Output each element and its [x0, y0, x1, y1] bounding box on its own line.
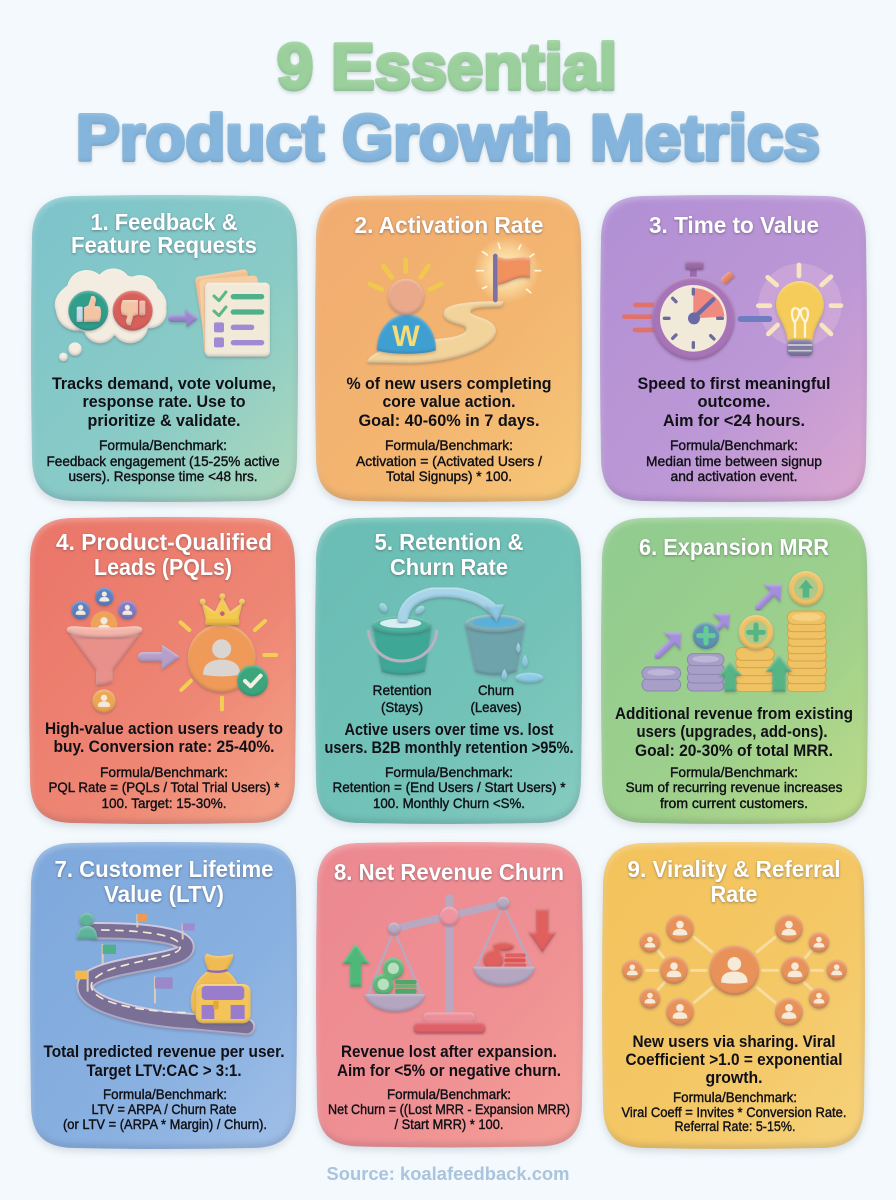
formula 9: Referral Rate: 5-15%. — [674, 1118, 796, 1134]
description 2: core value action. — [382, 392, 516, 411]
description 4 — [45, 719, 283, 756]
description 1 — [52, 374, 276, 430]
panel: 2 activation rate — [315, 195, 582, 502]
formula 2: Activation = (Activated Users / — [356, 453, 542, 469]
heading 5 — [374, 529, 524, 580]
formula 8 — [328, 1086, 570, 1132]
formula 3: Formula/Benchmark: — [670, 437, 798, 453]
heading 1: Feature Requests — [71, 232, 257, 258]
formula 1 — [46, 437, 280, 484]
formula 6: from current customers. — [660, 795, 808, 811]
description 6: Goal: 20-30% of total MRR. — [635, 741, 833, 760]
formula 5: 100. Monthly Churn <S%. — [373, 795, 525, 811]
formula 1: Feedback engagement (15-25% active — [46, 453, 280, 469]
formula 9 — [622, 1089, 846, 1134]
description 5 — [324, 720, 574, 757]
formula 3 — [646, 437, 822, 484]
formula 8: Net Churn = ((Lost MRR - Expansion MRR) — [328, 1101, 570, 1117]
formula 8: Formula/Benchmark: — [387, 1086, 511, 1102]
heading 8: 8. Net Revenue Churn — [334, 859, 564, 885]
description 3: Speed to first meaningful — [638, 374, 830, 393]
heading 7: 7. Customer Lifetime — [54, 856, 274, 882]
panel: 8 net revenue churn — [316, 842, 583, 1147]
bucket labels: (Stays) — [381, 699, 423, 715]
formula 1: Formula/Benchmark: — [99, 437, 227, 453]
formula 8: / Start MRR) * 100. — [394, 1116, 504, 1132]
bucket labels: Retention — [372, 682, 432, 698]
description 1: Tracks demand, vote volume, — [52, 374, 276, 393]
formula 4: 100. Target: 15-30%. — [102, 795, 226, 811]
description 7 — [44, 1042, 284, 1080]
description 8 — [337, 1042, 561, 1080]
description 1: response rate. Use to — [82, 392, 246, 411]
formula 6: Sum of recurring revenue increases — [626, 779, 842, 795]
description 4: buy. Conversion rate: 25-40%. — [54, 737, 274, 756]
description 9 — [626, 1032, 842, 1087]
bucket labels: (Leaves) — [470, 699, 522, 715]
description 3: Aim for <24 hours. — [663, 411, 805, 430]
description 2 — [346, 374, 552, 430]
panel: 6 expansion mrr — [601, 517, 868, 824]
description 8: Revenue lost after expansion. — [341, 1042, 557, 1061]
formula 7 — [63, 1086, 267, 1132]
heading 7 — [54, 856, 274, 907]
heading 2: 2. Activation Rate — [354, 212, 544, 238]
panel: 9 virality and referral rate — [602, 842, 865, 1149]
description 6: users (upgrades, add-ons). — [636, 722, 828, 741]
bucket labels: Churn — [478, 682, 514, 698]
description 2: Goal: 40-60% in 7 days. — [358, 411, 540, 430]
formula 6: Formula/Benchmark: — [670, 764, 798, 780]
panel: 7 customer lifetime value — [30, 842, 297, 1149]
title: Product Growth Metrics — [76, 101, 820, 174]
heading 5: 5. Retention & — [374, 529, 524, 555]
bucket labels — [372, 682, 522, 715]
description 3 — [638, 374, 830, 430]
formula 2 — [356, 437, 542, 484]
icon: user walking path to flag: W — [392, 320, 420, 353]
formula 4: PQL Rate = (PQLs / Total Trial Users) * — [48, 779, 280, 795]
description 1: prioritize & validate. — [88, 411, 240, 430]
formula 9: Formula/Benchmark: — [673, 1089, 797, 1105]
formula 9: Viral Coeff = Invites * Conversion Rate. — [622, 1104, 846, 1120]
formula 6 — [626, 764, 842, 811]
formula 3: and activation event. — [670, 468, 798, 484]
description 5: users. B2B monthly retention >95%. — [324, 738, 574, 757]
icon: referral network — [622, 914, 847, 1026]
description 6 — [615, 704, 853, 760]
icon: user walking path to flag — [367, 237, 541, 363]
icon: thought cloud, checklist — [55, 268, 270, 361]
heading 7: Value (LTV) — [104, 881, 224, 907]
formula 4: Formula/Benchmark: — [100, 764, 228, 780]
formula 1: users). Response time <48 hrs. — [68, 468, 258, 484]
panel: 4 product-qualified leads — [29, 517, 296, 824]
heading 4 — [56, 529, 272, 580]
heading 9: 9. Virality & Referral — [628, 856, 840, 882]
heading 5: Churn Rate — [390, 554, 508, 580]
formula 7: (or LTV = (ARPA * Margin) / Churn). — [63, 1116, 267, 1132]
description 8: Aim for <5% or negative churn. — [337, 1061, 561, 1080]
formula 2: Formula/Benchmark: — [385, 437, 513, 453]
description 4: High-value action users ready to — [45, 719, 283, 738]
title — [76, 30, 820, 174]
heading 9: Rate — [710, 881, 758, 907]
description 7: Total predicted revenue per user. — [44, 1042, 284, 1061]
description 5: Active users over time vs. lost — [344, 720, 554, 739]
formula 7: Formula/Benchmark: — [103, 1086, 227, 1102]
icon: balance scale — [342, 897, 557, 1034]
formula 3: Median time between signup — [646, 453, 822, 469]
source line: Source: koalafeedback.com — [326, 1164, 570, 1184]
description 9: Coefficient >1.0 = exponential — [626, 1050, 842, 1069]
title: 9 Essential — [277, 30, 617, 103]
panel: 3 time to value — [600, 195, 867, 502]
heading 4: 4. Product-Qualified — [56, 529, 272, 555]
formula 2: Total Signups) * 100. — [386, 468, 512, 484]
panel: 1 feedback and feature requests — [31, 195, 298, 502]
description 3: outcome. — [698, 392, 770, 411]
heading 1 — [71, 209, 257, 258]
description 9: New users via sharing. Viral — [632, 1032, 836, 1051]
icon: two buckets — [368, 592, 543, 683]
heading 3: 3. Time to Value — [649, 212, 819, 238]
icon: road to treasure — [75, 913, 251, 1027]
description 7: Target LTV:CAC > 3:1. — [86, 1061, 242, 1080]
icon: growing coin stacks — [642, 571, 827, 692]
formula 7: LTV = ARPA / Churn Rate — [92, 1101, 237, 1117]
heading 9 — [628, 856, 840, 907]
formula 5: Formula/Benchmark: — [385, 764, 513, 780]
description 2: % of new users completing — [346, 374, 552, 393]
formula 5 — [332, 764, 566, 811]
icon: stopwatch and light bulb — [624, 261, 842, 360]
description 6: Additional revenue from existing — [615, 704, 853, 723]
heading 6: 6. Expansion MRR — [639, 534, 829, 560]
heading 1: 1. Feedback & — [90, 209, 238, 235]
panel: 5 retention and churn rate — [315, 517, 582, 824]
description 9: growth. — [706, 1068, 762, 1087]
heading 4: Leads (PQLs) — [94, 554, 232, 580]
formula 5: Retention = (End Users / Start Users) * — [332, 779, 566, 795]
icon: funnel to crowned user — [67, 587, 276, 713]
formula 4 — [48, 764, 280, 811]
